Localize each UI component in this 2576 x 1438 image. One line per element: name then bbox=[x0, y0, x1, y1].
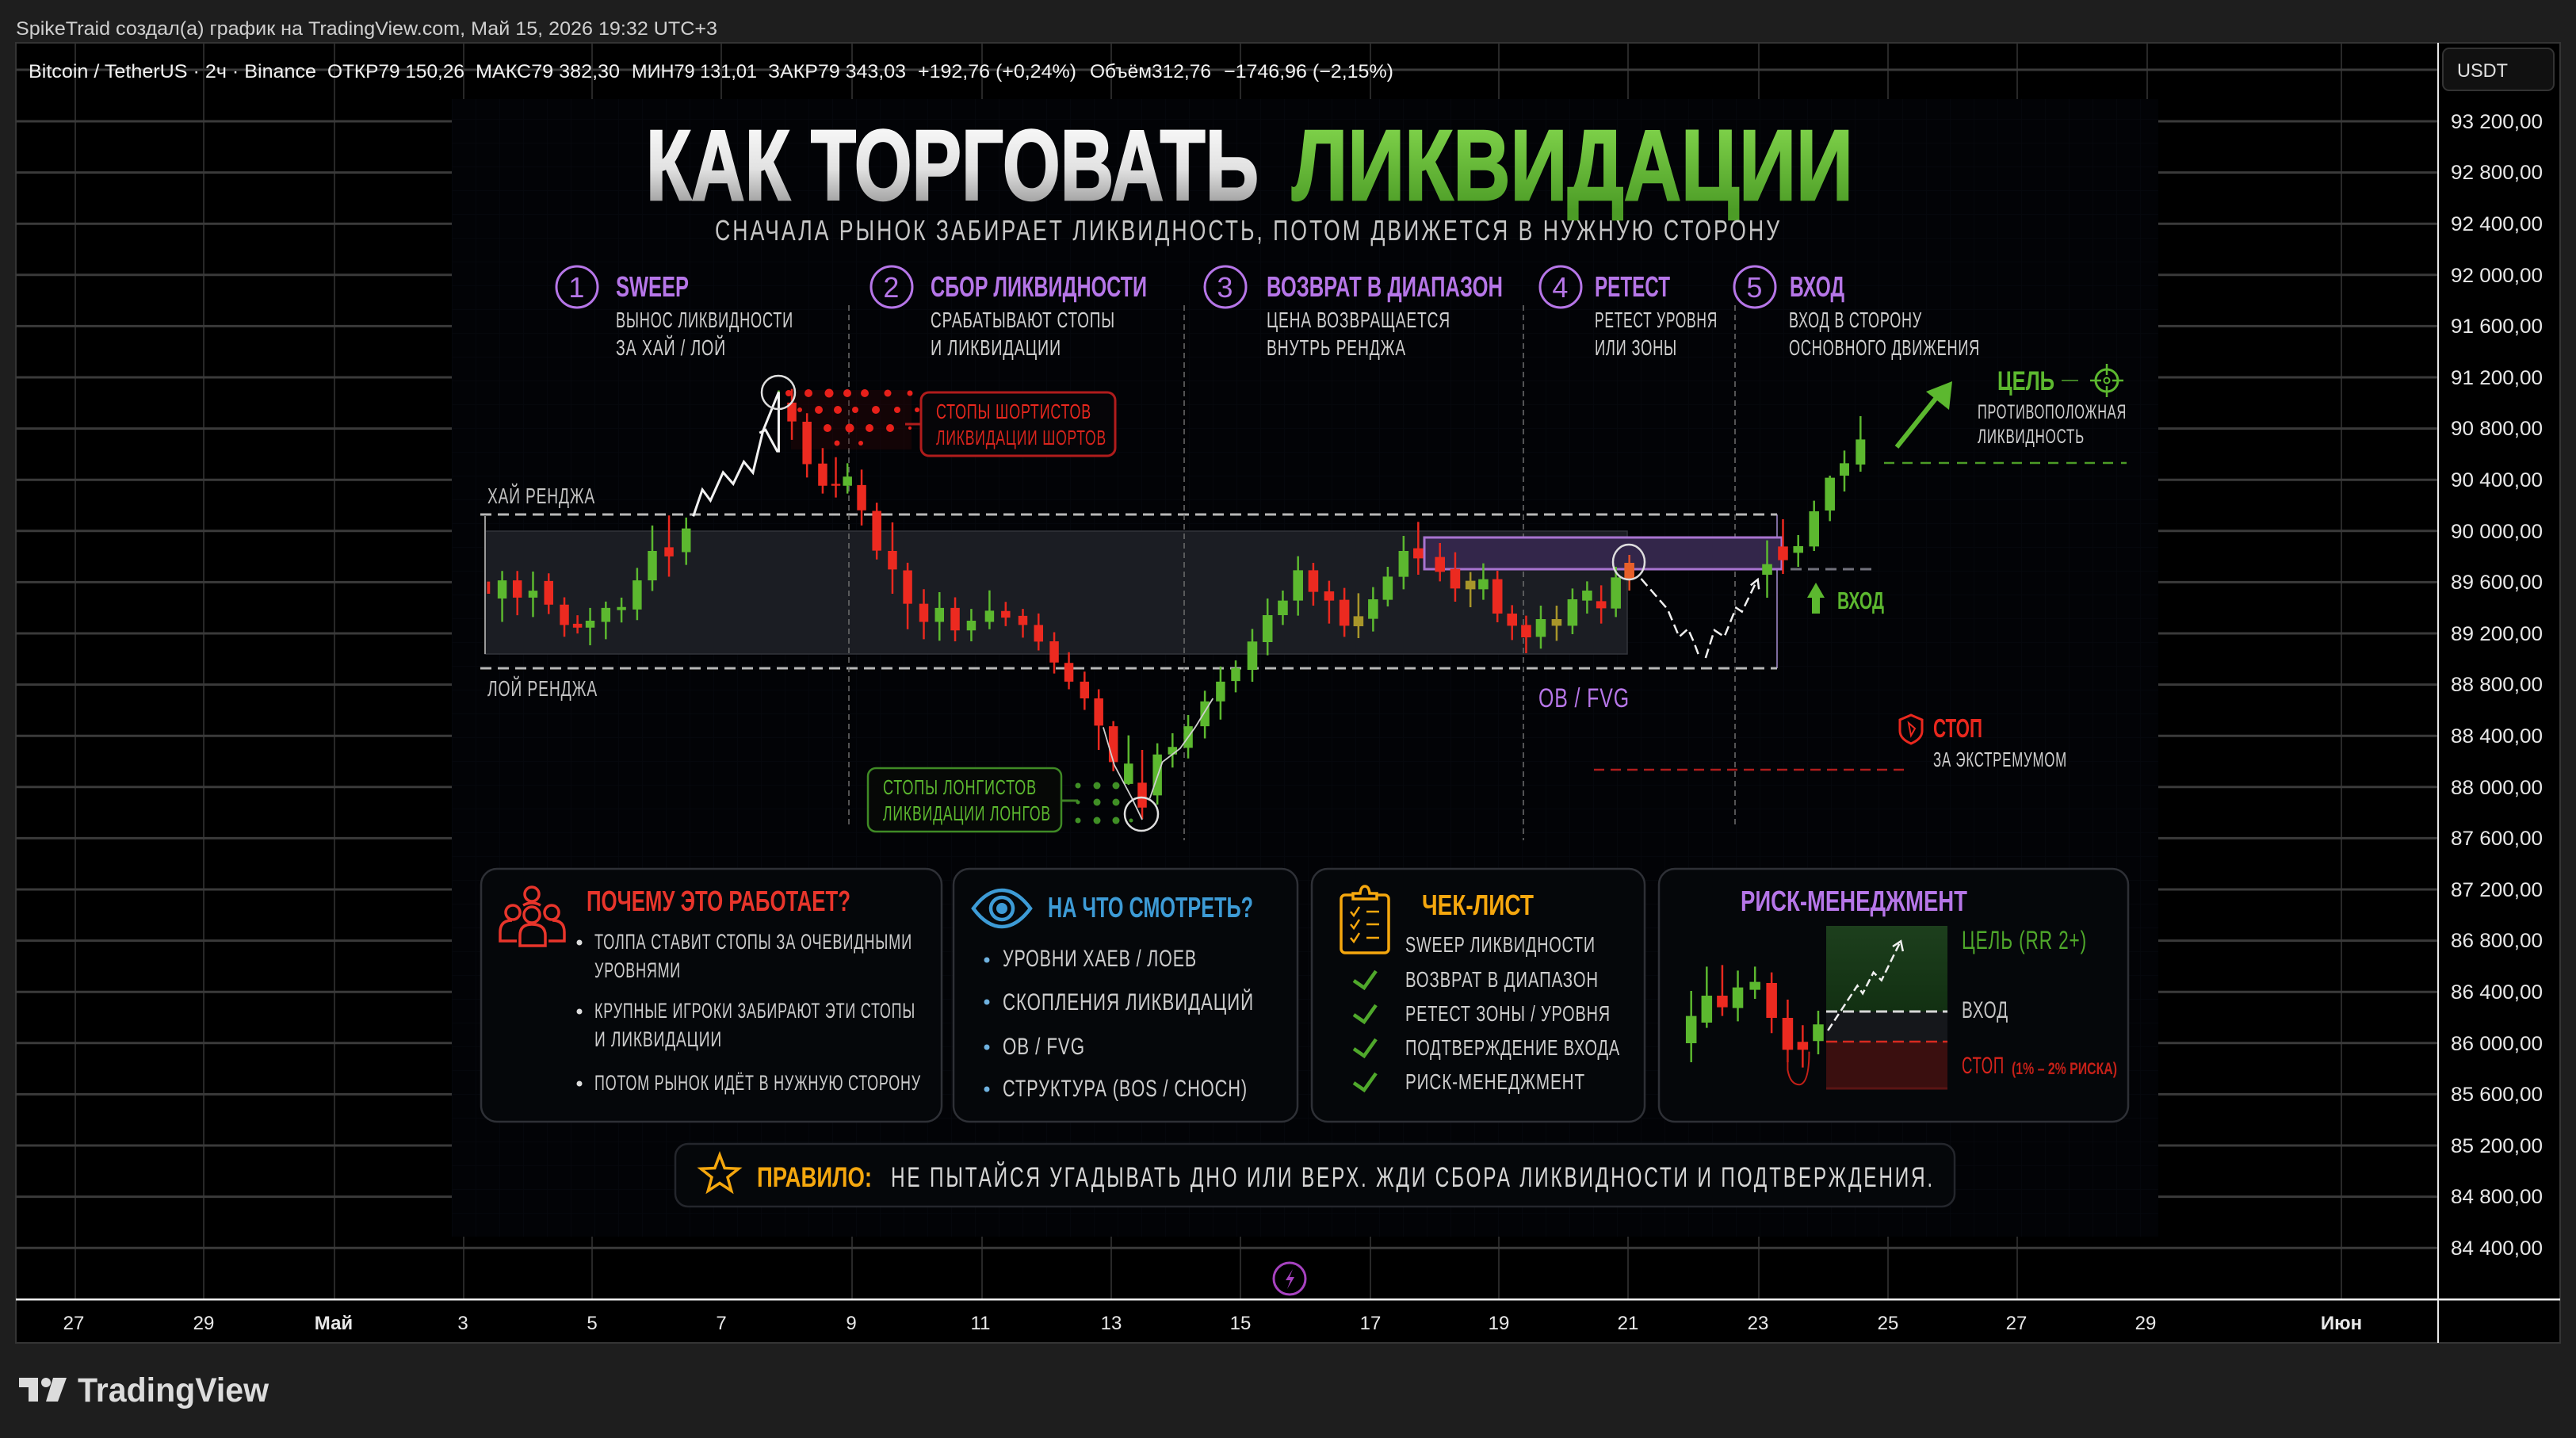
time axis labels: 27 bbox=[63, 1313, 84, 1334]
entry arrow and label bbox=[1807, 583, 1884, 614]
price axis labels: 86 800,00 bbox=[2451, 930, 2543, 952]
header caption: SpikeTraid создал(а) график на TradingView.com, Май 15, 2026 19:32 UTC+3 bbox=[16, 18, 717, 40]
rule label: ПРАВИЛО: bbox=[757, 1162, 872, 1193]
step 1: sweep: 1 bbox=[568, 271, 586, 304]
bullet list: ТОЛПА СТАВИТ СТОПЫ ЗА ОЧЕВИДНЫМИ bbox=[594, 930, 912, 954]
symbol and OHLC legend bbox=[29, 61, 1393, 82]
time axis labels: 15 bbox=[1230, 1313, 1251, 1334]
rule banner bbox=[675, 1144, 1955, 1207]
bullet list: КРУПНЫЕ ИГРОКИ ЗАБИРАЮТ ЭТИ СТОПЫ bbox=[594, 999, 915, 1023]
price axis labels: 93 200,00 bbox=[2451, 111, 2543, 133]
stop label with shield: СТОП bbox=[1933, 713, 1982, 743]
price axis labels: 88 000,00 bbox=[2451, 777, 2543, 799]
target arrow bbox=[1897, 381, 1952, 447]
price axis labels: 90 800,00 bbox=[2451, 418, 2543, 440]
icon: eye bbox=[973, 890, 1030, 927]
step 4: retest: РЕТЕСТ УРОВНЯ bbox=[1595, 308, 1718, 332]
time axis labels: 13 bbox=[1101, 1313, 1122, 1334]
OB / FVG zone bbox=[1424, 537, 1782, 569]
price axis labels: 92 000,00 bbox=[2451, 265, 2543, 287]
callout: long stops: ЛИКВИДАЦИИ ЛОНГОВ bbox=[883, 801, 1051, 825]
price axis labels: 92 400,00 bbox=[2451, 213, 2543, 235]
short stops dot cluster bbox=[785, 388, 919, 449]
icon: star bbox=[701, 1155, 739, 1191]
time axis labels: 5 bbox=[587, 1313, 598, 1334]
price axis labels: 87 600,00 bbox=[2451, 828, 2543, 850]
symbol and OHLC legend: МАКС79 382,30 bbox=[476, 61, 620, 82]
step 2: liquidity collection bbox=[871, 266, 1147, 360]
title bbox=[646, 109, 1853, 221]
green candles, right section bbox=[1248, 476, 1835, 682]
title: КАК ТОРГОВАТЬ bbox=[646, 109, 1259, 221]
time axis labels: Май bbox=[315, 1313, 353, 1334]
bullet list: СКОПЛЕНИЯ ЛИКВИДАЦИЙ bbox=[1003, 989, 1254, 1015]
check marks bbox=[1354, 971, 1376, 1090]
checklist items: РЕТЕСТ ЗОНЫ / УРОВНЯ bbox=[1405, 1001, 1611, 1026]
bullet list bbox=[984, 946, 1254, 1102]
time axis labels: 29 bbox=[193, 1313, 214, 1334]
entry arrow and label: ВХОД bbox=[1837, 587, 1884, 614]
symbol and OHLC legend: Bitcoin / TetherUS · 2ч · Binance bbox=[29, 61, 316, 82]
icon: clipboard bbox=[1341, 886, 1389, 953]
bullet list: OB / FVG bbox=[1003, 1034, 1085, 1060]
range high and low dashed lines bbox=[480, 514, 1777, 668]
entry level dashed line bbox=[1791, 568, 1872, 571]
risk labels: ВХОД bbox=[1962, 997, 2008, 1023]
heading: НА ЧТО СМОТРЕТЬ? bbox=[1048, 891, 1253, 924]
panel: why it works bbox=[481, 869, 942, 1122]
time axis labels: 11 bbox=[971, 1313, 990, 1334]
step 2: liquidity collection: СРАБАТЫВАЮТ СТОПЫ bbox=[931, 308, 1115, 332]
symbol and OHLC legend: МИН79 131,01 bbox=[632, 61, 757, 82]
risk labels bbox=[1962, 926, 2117, 1079]
checklist items: ПОДТВЕРЖДЕНИЕ ВХОДА bbox=[1405, 1035, 1620, 1060]
panel: risk management bbox=[1659, 869, 2128, 1122]
step 4: retest: ИЛИ ЗОНЫ bbox=[1595, 335, 1677, 360]
step 2: liquidity collection: 2 bbox=[883, 271, 900, 304]
step 5: entry: 5 bbox=[1746, 271, 1764, 304]
red candles, right section bbox=[1309, 519, 1788, 653]
callout: short stops bbox=[905, 392, 1115, 456]
step 3: return to range: ВОЗВРАТ В ДИАПАЗОН bbox=[1267, 270, 1503, 303]
TradingView logo: TradingView bbox=[78, 1371, 269, 1409]
price axis labels: 90 000,00 bbox=[2451, 521, 2543, 543]
green candles, left section bbox=[498, 391, 1240, 805]
price axis labels: 90 400,00 bbox=[2451, 469, 2543, 491]
step 1: sweep: SWEEP bbox=[616, 270, 689, 303]
panel: infographic background bbox=[452, 99, 2158, 1237]
bullet list: ПОТОМ РЫНОК ИДЁТ В НУЖНУЮ СТОРОНУ bbox=[594, 1071, 921, 1095]
heading: РИСК-МЕНЕДЖМЕНТ bbox=[1741, 885, 1967, 917]
target label with crosshair bbox=[1884, 364, 2127, 463]
step 2: liquidity collection: И ЛИКВИДАЦИИ bbox=[931, 335, 1061, 360]
white sweep zigzag bbox=[694, 392, 1213, 820]
callout: long stops bbox=[868, 768, 1078, 832]
time axis labels: 7 bbox=[716, 1313, 727, 1334]
breakout candles bbox=[1840, 416, 1865, 491]
checklist items: РИСК-МЕНЕДЖМЕНТ bbox=[1405, 1069, 1585, 1094]
bullet list: СТРУКТУРА (BOS / CHOCH) bbox=[1003, 1076, 1248, 1102]
heading: ПОЧЕМУ ЭТО РАБОТАЕТ? bbox=[587, 885, 850, 917]
time axis labels: 25 bbox=[1878, 1313, 1898, 1334]
rule text: НЕ ПЫТАЙСЯ УГАДЫВАТЬ ДНО ИЛИ ВЕРХ. ЖДИ СБОРА ЛИКВИДНОСТИ И ПОДТВЕРЖДЕНИЯ. bbox=[891, 1161, 1935, 1193]
step 5: entry bbox=[1734, 266, 1980, 360]
time axis labels: 17 bbox=[1360, 1313, 1381, 1334]
time axis labels: 23 bbox=[1748, 1313, 1768, 1334]
risk labels: СТОП bbox=[1962, 1053, 2005, 1079]
currency box bbox=[2443, 48, 2554, 90]
time axis labels: 9 bbox=[846, 1313, 857, 1334]
bullet list bbox=[577, 930, 921, 1095]
retest dashed zigzag arrow bbox=[1641, 579, 1759, 658]
callout: long stops: СТОПЫ ЛОНГИСТОВ bbox=[883, 775, 1037, 799]
currency box: USDT bbox=[2457, 60, 2508, 82]
time axis labels: 29 bbox=[2135, 1313, 2156, 1334]
checklist items bbox=[1405, 932, 1620, 1094]
checklist items: SWEEP ЛИКВИДНОСТИ bbox=[1405, 932, 1596, 957]
symbol and OHLC legend: ОТКР79 150,26 bbox=[327, 61, 464, 82]
callout: short stops: СТОПЫ ШОРТИСТОВ bbox=[936, 400, 1091, 423]
target label with crosshair: ПРОТИВОПОЛОЖНАЯ bbox=[1978, 401, 2127, 423]
target label with crosshair: ЦЕЛЬ bbox=[1997, 366, 2054, 396]
heading: ЧЕК-ЛИСТ bbox=[1422, 889, 1534, 921]
step 5: entry: ВХОД В СТОРОНУ bbox=[1789, 308, 1922, 332]
step 5: entry: ВХОД bbox=[1790, 270, 1844, 303]
risk labels: (1% – 2% РИСКА) bbox=[2012, 1060, 2117, 1078]
bullet list: И ЛИКВИДАЦИИ bbox=[594, 1027, 722, 1051]
time axis labels: 19 bbox=[1489, 1313, 1509, 1334]
icon: lightning event marker bbox=[1274, 1263, 1305, 1295]
price axis labels: 85 200,00 bbox=[2451, 1135, 2543, 1157]
time axis labels: 3 bbox=[457, 1313, 468, 1334]
step 3: return to range bbox=[1205, 266, 1503, 360]
panel: checklist bbox=[1312, 869, 1645, 1122]
step 1: sweep: ЗА ХАЙ / ЛОЙ bbox=[616, 335, 726, 360]
price axis labels: 89 600,00 bbox=[2451, 572, 2543, 594]
step 4: retest: РЕТЕСТ bbox=[1595, 270, 1670, 303]
step 5: entry: ОСНОВНОГО ДВИЖЕНИЯ bbox=[1789, 335, 1980, 360]
main chart bbox=[480, 305, 2127, 840]
step 2: liquidity collection: СБОР ЛИКВИДНОСТИ bbox=[931, 270, 1147, 303]
step 3: return to range: 3 bbox=[1217, 271, 1234, 304]
mini candlestick chart bbox=[1686, 941, 1903, 1084]
price axis labels: 86 400,00 bbox=[2451, 981, 2543, 1004]
red candles, left section bbox=[487, 389, 1147, 819]
sweep circle markers bbox=[762, 376, 1645, 831]
price axis labels: 88 800,00 bbox=[2451, 674, 2543, 696]
range box bbox=[485, 514, 1777, 668]
label: OB / FVG: OB / FVG bbox=[1538, 683, 1630, 713]
symbol and OHLC legend: −1746,96 (−2,15%) bbox=[1224, 61, 1393, 82]
stop label with shield bbox=[1594, 713, 2067, 771]
long stops dot cluster bbox=[1075, 782, 1133, 824]
subtitle: СНАЧАЛА РЫНОК ЗАБИРАЕТ ЛИКВИДНОСТЬ, ПОТОМ ДВИЖЕТСЯ В НУЖНУЮ СТОРОНУ bbox=[715, 214, 1782, 247]
price axis labels: 88 400,00 bbox=[2451, 725, 2543, 748]
bullet list: УРОВНИ ХАЕВ / ЛОЕВ bbox=[1003, 946, 1197, 972]
price axis labels: 86 000,00 bbox=[2451, 1033, 2543, 1055]
time axis labels: 27 bbox=[2006, 1313, 2027, 1334]
step 4: retest bbox=[1540, 266, 1718, 360]
label: range high: ХАЙ РЕНДЖА bbox=[487, 484, 595, 508]
price axis labels: 84 800,00 bbox=[2451, 1186, 2543, 1208]
label: range low: ЛОЙ РЕНДЖА bbox=[487, 676, 598, 701]
step 3: return to range: ЦЕНА ВОЗВРАЩАЕТСЯ bbox=[1267, 308, 1450, 332]
icon: crowd bbox=[500, 887, 564, 946]
price axis labels: 85 600,00 bbox=[2451, 1084, 2543, 1106]
price axis labels: 84 400,00 bbox=[2451, 1237, 2543, 1260]
risk labels: ЦЕЛЬ (RR 2+) bbox=[1962, 926, 2087, 954]
symbol and OHLC legend: ЗАКР79 343,03 bbox=[768, 61, 906, 82]
step 3: return to range: ВНУТРЬ РЕНДЖА bbox=[1267, 335, 1406, 360]
step 1: sweep bbox=[556, 266, 793, 360]
time axis labels: 21 bbox=[1618, 1313, 1638, 1334]
title: ЛИКВИДАЦИИ bbox=[1292, 109, 1853, 221]
target label with crosshair: ЛИКВИДНОСТЬ bbox=[1978, 426, 2085, 448]
stop label with shield: ЗА ЭКСТРЕМУМОМ bbox=[1933, 748, 2067, 771]
price axis labels: 91 600,00 bbox=[2451, 316, 2543, 338]
risk zones bbox=[1826, 926, 1947, 1089]
step 1: sweep: ВЫНОС ЛИКВИДНОСТИ bbox=[616, 308, 793, 332]
checklist items: ВОЗВРАТ В ДИАПАЗОН bbox=[1405, 967, 1599, 992]
symbol and OHLC legend: Объём312,76 bbox=[1090, 61, 1211, 82]
time axis labels: Июн bbox=[2321, 1313, 2362, 1334]
callout: short stops: ЛИКВИДАЦИИ ШОРТОВ bbox=[936, 426, 1106, 449]
price axis labels: 89 200,00 bbox=[2451, 623, 2543, 645]
time axis labels bbox=[63, 1313, 2362, 1334]
price axis labels: 92 800,00 bbox=[2451, 162, 2543, 184]
panel: what to watch bbox=[954, 869, 1298, 1122]
price axis labels bbox=[2451, 111, 2543, 1260]
price axis labels: 87 200,00 bbox=[2451, 879, 2543, 901]
step 4: retest: 4 bbox=[1552, 271, 1569, 304]
step dividers bbox=[849, 305, 1735, 840]
price axis labels: 91 200,00 bbox=[2451, 367, 2543, 389]
symbol and OHLC legend: +192,76 (+0,24%) bbox=[918, 61, 1076, 82]
bullet list: УРОВНЯМИ bbox=[594, 958, 681, 982]
